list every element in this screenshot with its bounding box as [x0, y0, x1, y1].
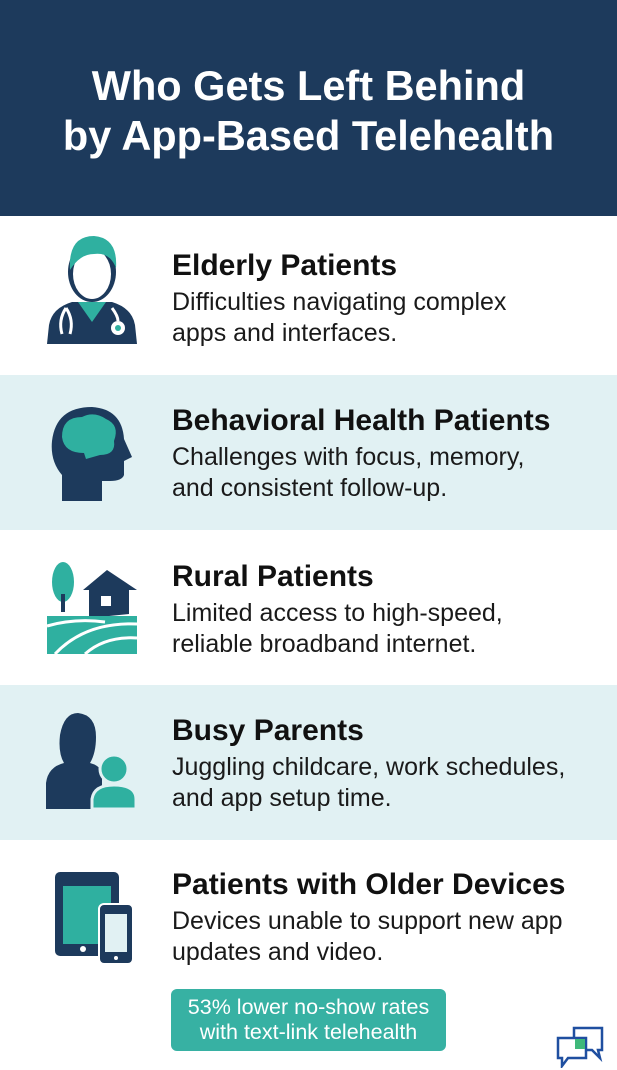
icon: doctor	[47, 236, 137, 344]
callout: stat	[171, 989, 446, 1051]
text: elderly: Difficulties navigating complex	[172, 288, 506, 316]
text: elderly	[172, 249, 506, 347]
text: parents: Busy Parents	[172, 714, 364, 747]
text: behavioral: and consistent follow-up.	[172, 474, 447, 502]
title	[0, 0, 617, 216]
callout: stat: with text-link telehealth	[200, 1020, 417, 1044]
icon: head with brain	[52, 407, 132, 501]
icon: tablet and phone	[55, 872, 132, 963]
text: parents: Juggling childcare, work schedules,	[172, 753, 565, 781]
text: rural	[172, 560, 503, 658]
callout: stat: 53% lower no-show rates	[188, 995, 429, 1019]
text: behavioral	[172, 404, 550, 502]
text: rural: Rural Patients	[172, 560, 374, 593]
text: behavioral: Behavioral Health Patients	[172, 404, 550, 437]
text: rural: reliable broadband internet.	[172, 630, 476, 658]
text: rural: Limited access to high-speed,	[172, 599, 503, 627]
text: elderly: Elderly Patients	[172, 249, 397, 282]
icon: chat bubbles	[556, 1026, 604, 1068]
title: by App-Based Telehealth	[63, 112, 554, 159]
text: devices: Devices unable to support new app	[172, 907, 563, 935]
title: Who Gets Left Behind	[92, 62, 525, 109]
icon: farm house	[47, 562, 137, 654]
panel: rural	[47, 560, 503, 658]
icon: parent and child	[46, 713, 134, 809]
panel: elderly patients	[47, 236, 506, 347]
panel: older devices	[55, 868, 604, 1068]
text: devices: updates and video.	[172, 938, 383, 966]
text: elderly: apps and interfaces.	[172, 319, 397, 347]
text: parents	[172, 714, 565, 812]
text: devices: Patients with Older Devices	[172, 868, 565, 901]
panel: behavioral health	[0, 375, 617, 530]
text: behavioral: Challenges with focus, memory,	[172, 443, 524, 471]
panel: busy parents	[0, 685, 617, 840]
text: parents: and app setup time.	[172, 784, 392, 812]
text: devices	[172, 868, 565, 966]
